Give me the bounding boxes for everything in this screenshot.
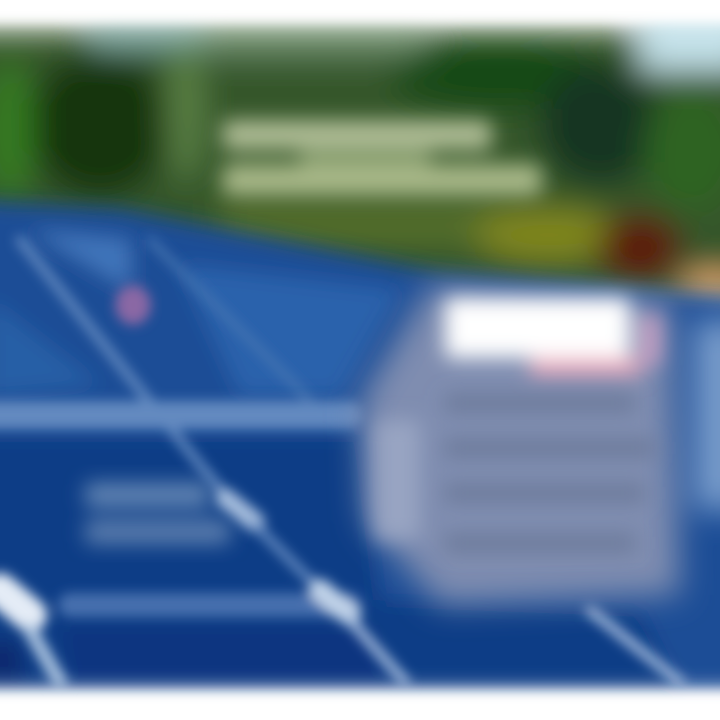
- panel: right info card: [360, 285, 720, 605]
- icon: pink glare: [115, 285, 151, 325]
- heading: blurred title text: [222, 120, 542, 196]
- text block: blurred left caption: [85, 483, 230, 544]
- card header: [445, 298, 660, 376]
- panel grid lines: [0, 240, 680, 682]
- panel: tree background: [0, 15, 720, 310]
- panel: solar array: [0, 200, 720, 690]
- card text lines: [375, 395, 655, 551]
